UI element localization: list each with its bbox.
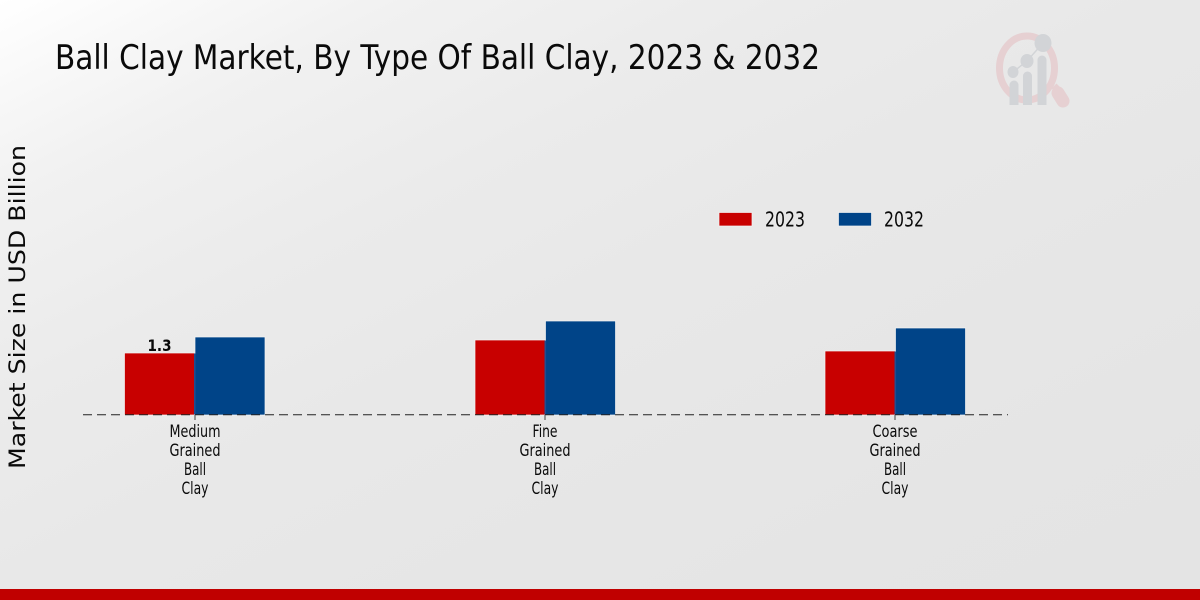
- category label: Coarse Grained Ball Clay: Coarse: [872, 422, 918, 442]
- category label: Medium Grained Ball Clay: Medium: [170, 422, 220, 442]
- legend label 2032: 2032: [884, 208, 924, 232]
- category label: Medium Grained Ball Clay: [170, 422, 220, 499]
- category label: Coarse Grained Ball Clay: [870, 422, 920, 499]
- bars: Fine Grained Ball Clay: [475, 321, 616, 415]
- legend swatch 2023: [719, 212, 752, 226]
- category label: Fine Grained Ball Clay: Fine: [532, 422, 558, 442]
- category label: Medium Grained Ball Clay: Grained: [170, 441, 220, 461]
- category label: Coarse Grained Ball Clay: Grained: [870, 441, 920, 461]
- category label: Coarse Grained Ball Clay: Ball: [884, 460, 906, 480]
- category label: Fine Grained Ball Clay: [520, 422, 570, 499]
- bars: Medium Grained Ball Clay: [124, 337, 265, 415]
- y axis label: Market Size in USD Billion: [5, 145, 31, 469]
- legend label 2023: 2023: [765, 208, 805, 232]
- category label: Coarse Grained Ball Clay: Clay: [882, 479, 908, 499]
- baseline axis: [83, 414, 1008, 416]
- legend: [719, 208, 924, 232]
- data label: 1.3: [148, 336, 172, 355]
- category label: Medium Grained Ball Clay: Clay: [182, 479, 208, 499]
- legend swatch 2032: [838, 212, 872, 226]
- bar chart: [83, 321, 1008, 499]
- bottom red band: [0, 589, 1200, 600]
- bars: Coarse Grained Ball Clay: [825, 328, 966, 415]
- icon: magnifier logo watermark: [1000, 34, 1063, 105]
- category label: Fine Grained Ball Clay: Ball: [534, 460, 556, 480]
- title: Ball Clay Market, By Type Of Ball Clay, 2023 & 2032: [55, 38, 820, 78]
- category label: Fine Grained Ball Clay: Grained: [520, 441, 570, 461]
- category label: Fine Grained Ball Clay: Clay: [532, 479, 558, 499]
- category label: Medium Grained Ball Clay: Ball: [184, 460, 206, 480]
